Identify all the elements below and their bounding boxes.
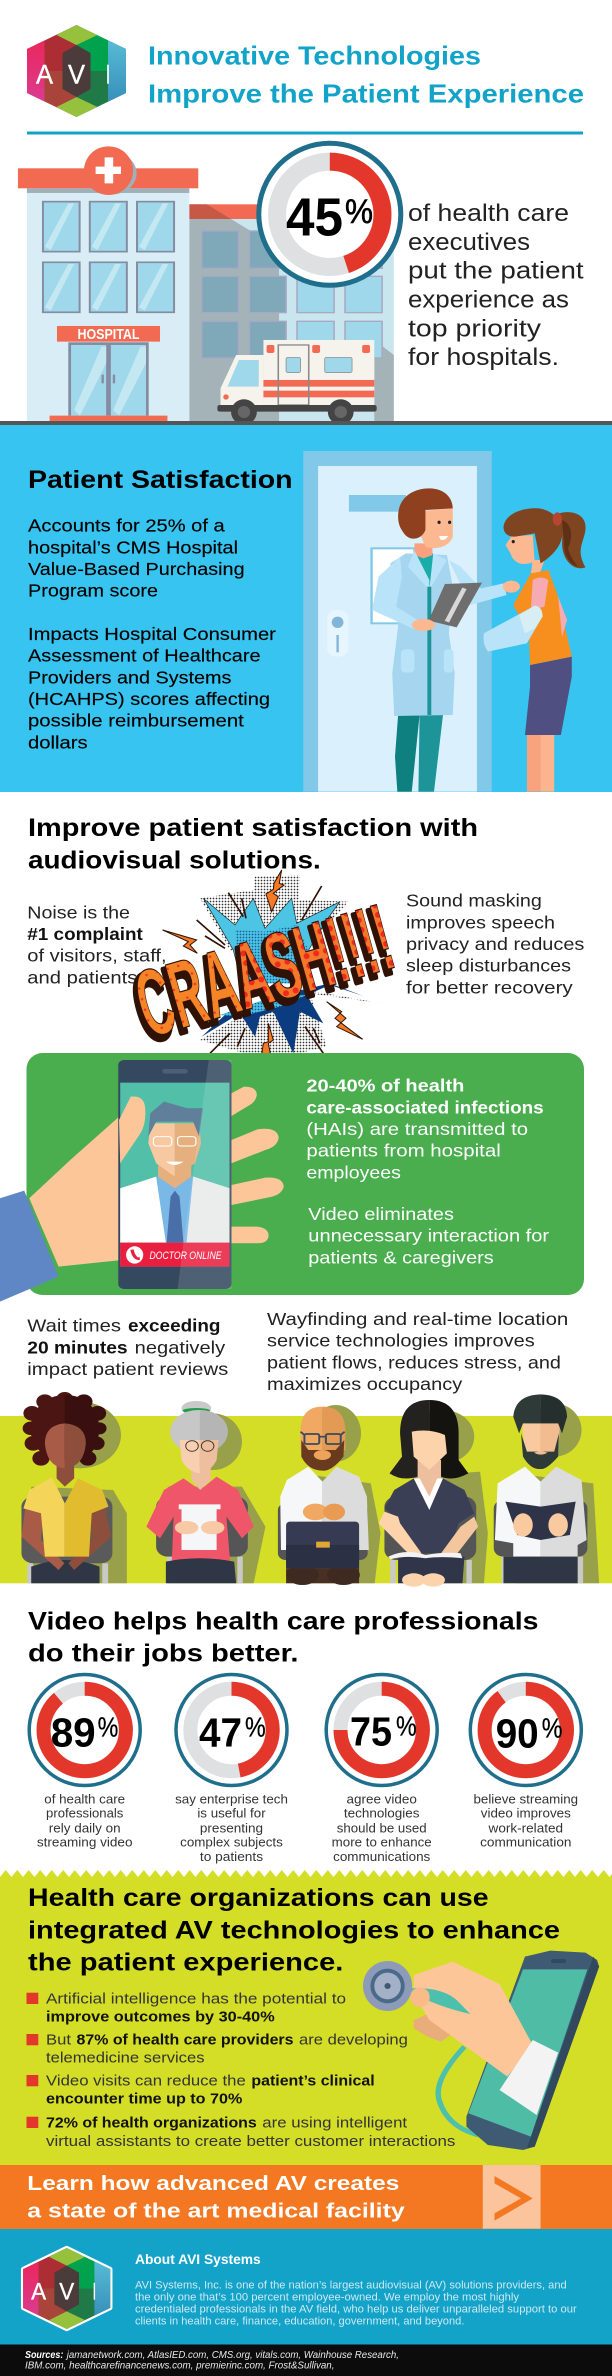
footer logo: I <box>93 2279 96 2306</box>
text block: wayfinding: maximizes occupancy <box>267 1374 462 1394</box>
about text: AVI Systems, Inc. is one of the nation’s largest audiovisual (AV) solutions providers, and <box>135 2279 567 2291</box>
stat: 89 percent: % <box>98 1712 118 1743</box>
stat: 47 percent: complex subjects <box>180 1836 283 1850</box>
bullet: video visits <box>26 2072 375 2108</box>
bullet: artificial intelligence: Artificial intelligence has the potential to <box>46 1990 346 2007</box>
about text: the only one that’s 100 percent employee-owned. We employ the most highly <box>135 2291 520 2303</box>
text block: video eliminates interaction: patients & caregivers <box>308 1247 494 1267</box>
heading: video helps: do their jobs better. <box>28 1640 298 1668</box>
stat: 89 percent: 89 <box>51 1710 96 1756</box>
text block: CMS score <box>28 516 245 601</box>
sources bar: Sources: <box>25 2350 63 2361</box>
stat: 47 percent: say enterprise tech <box>175 1792 288 1806</box>
bullet: video visits: Video visits can reduce the <box>46 2072 246 2089</box>
panel: integrated AV technologies <box>0 1870 612 2165</box>
stat: 89 percent: professionals <box>46 1807 123 1821</box>
illustration: hospital buildings and ambulance <box>18 146 400 425</box>
footer logo: A <box>31 2279 46 2306</box>
text block: CMS score: Program score <box>28 581 158 601</box>
text block: HCAHPS: possible reimbursement <box>28 711 244 731</box>
phone label: doctor online: DOCTOR ONLINE <box>150 1250 222 1262</box>
bullet: virtual assistants <box>26 2115 455 2150</box>
text block: wayfinding: Wayfinding and real-time location <box>267 1309 568 1329</box>
sources bar: IBM.com, healthcarefinancenews.com, premierinc.com, Frost&Sullivan, <box>25 2361 334 2372</box>
stat: 47 percent <box>175 1674 288 1864</box>
person 1: woman with afro <box>21 1392 112 1583</box>
45% donut chart: 45 <box>286 188 343 248</box>
text block: HCAHPS: Assessment of Healthcare <box>28 646 261 666</box>
header logo: AVI hexagon: I <box>106 60 110 90</box>
text block: infections: employees <box>306 1162 401 1182</box>
heading: improve patient satisfaction: audiovisual solutions. <box>28 846 321 874</box>
about heading: About AVI Systems <box>135 2251 261 2267</box>
text block: infections: (HAIs) are transmitted to <box>306 1119 528 1139</box>
footer logo <box>23 2247 111 2330</box>
bullet: video visits: encounter time up to 70% <box>46 2091 242 2108</box>
icon: arrow <box>483 2165 541 2229</box>
stat text: 45 percent <box>408 200 584 371</box>
text block: infections: care-associated infections <box>306 1097 544 1117</box>
text block: noise complaint: #1 complaint <box>27 924 143 944</box>
text block: video eliminates interaction: Video eliminates <box>308 1204 454 1224</box>
text block: noise complaint <box>27 902 167 987</box>
stat: 75 percent: agree video <box>347 1792 417 1806</box>
text block: CMS score: hospital’s CMS Hospital <box>28 537 238 557</box>
doctor <box>372 488 520 792</box>
text block: wayfinding <box>267 1309 568 1394</box>
text block: wait times <box>27 1316 229 1379</box>
text block: sound masking: privacy and reduces <box>406 934 585 954</box>
stat: 90 percent <box>470 1674 581 1850</box>
illustration: hand holding phone with doctor <box>0 1060 284 1302</box>
heading: video helps: Video helps health care professionals <box>28 1607 538 1635</box>
person 5: bearded man with book <box>494 1394 587 1583</box>
text block: noise complaint: Noise is the <box>27 902 130 922</box>
text block: wayfinding: service technologies improves <box>267 1331 535 1351</box>
text block: sound masking: improves speech <box>406 912 555 932</box>
bullet: telemedicine: But <box>46 2031 72 2048</box>
call to action banner: a state of the art medical facility <box>27 2199 405 2222</box>
text block: sound masking: sleep disturbances <box>406 956 571 976</box>
stat text: 45 percent: executives <box>408 229 530 256</box>
stat: 47 percent: presenting <box>200 1821 263 1835</box>
sources bar <box>0 2344 612 2376</box>
text block: sound masking <box>406 891 585 997</box>
title: Improve the Patient Experience <box>148 81 584 109</box>
person 2: older woman with paper <box>146 1401 254 1583</box>
stat: 89 percent: rely daily on <box>49 1821 121 1835</box>
text block: video eliminates interaction: unnecessary interaction for <box>308 1226 549 1246</box>
about text: clients in health care, finance, education, government, and beyond. <box>135 2315 464 2327</box>
header logo: AVI hexagon: A <box>36 60 53 90</box>
stat: 47 percent: 47 <box>199 1710 242 1756</box>
door <box>303 451 492 792</box>
stat: 89 percent: streaming video <box>37 1836 133 1850</box>
sleeve <box>0 1191 59 1302</box>
stat text: 45 percent: put the patient <box>408 258 584 285</box>
footer logo: V <box>59 2279 74 2306</box>
stat: 47 percent: to patients <box>200 1850 263 1864</box>
bullet: virtual assistants: 72% of health organizations <box>46 2115 257 2132</box>
stat: 89 percent <box>29 1674 140 1850</box>
bullet: telemedicine: telemedicine services <box>46 2050 204 2067</box>
hand and sleeve <box>410 1962 558 2115</box>
sources bar: jamanetwork.com, AtlasIED.com, CMS.org, vitals.com, Wainhouse Research, <box>65 2350 399 2361</box>
stethoscope head <box>363 1961 412 2011</box>
back building <box>189 204 400 421</box>
bullet: virtual assistants: virtual assistants to create better customer interactions <box>46 2133 455 2150</box>
45% donut chart: % <box>345 193 373 231</box>
text block: wait times: Wait times <box>27 1316 121 1336</box>
stat text: 45 percent: experience as <box>408 287 569 314</box>
stat: 75 percent: 75 <box>350 1709 392 1755</box>
thumb <box>119 1096 145 1163</box>
person 3: bald man with briefcase <box>278 1407 369 1585</box>
heading: health care organizations: integrated AV technologies to enhance <box>28 1916 560 1944</box>
hand behind phone <box>29 1087 284 1267</box>
illustration: doctor and patient at door <box>303 451 586 792</box>
bullets <box>26 1990 455 2150</box>
heading: improve patient satisfaction: Improve patient satisfaction with <box>28 814 478 842</box>
stat: 90 percent: communication <box>480 1836 571 1850</box>
text block: video eliminates interaction <box>308 1204 549 1267</box>
stat text: 45 percent: top priority <box>408 315 541 342</box>
text block: CMS score: Value-Based Purchasing <box>28 559 245 579</box>
illustration: crash comic burst <box>122 870 405 1063</box>
ground line <box>0 421 612 425</box>
heading: video helps <box>28 1607 538 1668</box>
text block: HCAHPS: dollars <box>28 732 88 752</box>
heading: health care organizations: the patient experience. <box>28 1949 343 1977</box>
stat: 47 percent: is useful for <box>197 1807 266 1821</box>
stat: 47 percent: % <box>245 1712 266 1743</box>
main hospital building <box>18 146 198 421</box>
text block: noise complaint: of visitors, staff, <box>27 946 167 966</box>
bullet: artificial intelligence: improve outcomes by 30-40% <box>46 2009 275 2026</box>
title: Innovative Technologies <box>148 42 481 70</box>
text block: sound masking: for better recovery <box>406 977 573 997</box>
text block: sound masking: Sound masking <box>406 891 542 911</box>
text block: wait times: exceeding <box>128 1316 220 1336</box>
text block: CMS score: Accounts for 25% of a <box>28 516 225 536</box>
stat: 90 percent: work-related <box>487 1821 563 1835</box>
heading: improve patient satisfaction <box>28 814 478 874</box>
halftone <box>200 875 382 1055</box>
text block: infections: patients from hospital <box>306 1141 501 1161</box>
stat: 89 percent: of health care <box>44 1792 125 1806</box>
stat: 75 percent: communications <box>333 1850 430 1864</box>
text block: wait times: impact patient reviews <box>27 1359 229 1379</box>
patient <box>483 508 586 792</box>
bullet: telemedicine: 87% of health care providers <box>76 2031 294 2048</box>
hospital sign text: HOSPITAL <box>78 326 140 343</box>
text block: wayfinding: patient flows, reduces stress, and <box>267 1352 561 1372</box>
illustration: hand with stethoscope from phone <box>363 1951 599 2150</box>
title <box>148 42 584 109</box>
stat: 75 percent <box>326 1674 437 1864</box>
panel: patient satisfaction <box>0 425 612 792</box>
text block: wait times: negatively <box>135 1337 225 1357</box>
call to action banner <box>0 2165 612 2229</box>
stat text: 45 percent: for hospitals. <box>408 344 559 371</box>
stat text: 45 percent: of health care <box>408 200 569 227</box>
illustration: crash comic burst: CRAASH!!!! <box>125 884 405 1058</box>
header logo: AVI hexagon: V <box>68 60 85 90</box>
text block: HCAHPS: Providers and Systems <box>28 667 232 687</box>
call to action banner: Learn how advanced AV creates <box>27 2172 399 2195</box>
phone <box>118 1060 231 1289</box>
heading: health care organizations: Health care organizations can use <box>28 1884 489 1912</box>
stat: 75 percent: more to enhance <box>332 1836 432 1850</box>
panel: green telemedicine <box>0 1053 584 1302</box>
stat: 75 percent: % <box>396 1711 417 1742</box>
45% donut chart <box>259 143 401 285</box>
bullet: artificial intelligence <box>26 1990 346 2026</box>
about text <box>135 2279 577 2327</box>
text block: infections: 20-40% of health <box>306 1076 464 1096</box>
heading: health care organizations <box>28 1884 560 1977</box>
bullet: telemedicine: are developing <box>299 2031 408 2048</box>
header logo: AVI hexagon <box>26 24 126 118</box>
ambulance <box>217 340 377 425</box>
illustration: waiting room people <box>0 1392 612 1587</box>
about text: credentialed professionals in the AV field, who help us deliver unparalleled support to our <box>135 2303 577 2315</box>
bullet: video visits: patient’s clinical <box>251 2072 375 2089</box>
person 4: woman with magazine <box>379 1400 478 1587</box>
text block: noise complaint: and patients <box>27 967 138 987</box>
stat: 90 percent: % <box>542 1713 562 1744</box>
heading: patient satisfaction: Patient Satisfaction <box>28 466 293 494</box>
stat: 90 percent: 90 <box>496 1711 539 1757</box>
stat: 75 percent: technologies <box>344 1807 420 1821</box>
text block: HCAHPS: Impacts Hospital Consumer <box>28 624 276 644</box>
text block: HCAHPS <box>28 624 276 752</box>
text block: HCAHPS: (HCAHPS) scores affecting <box>28 689 270 709</box>
bullet: virtual assistants: are using intelligent <box>262 2115 408 2132</box>
stat: 75 percent: should be used <box>337 1821 427 1835</box>
bullet: telemedicine <box>26 2031 408 2067</box>
text block: wait times: 20 minutes <box>27 1337 128 1357</box>
phone <box>466 1951 599 2150</box>
panel: about AVI systems <box>0 2229 612 2345</box>
text block: infections <box>306 1076 544 1182</box>
stat: 90 percent: video improves <box>481 1807 571 1821</box>
stat: 90 percent: believe streaming <box>474 1792 578 1806</box>
